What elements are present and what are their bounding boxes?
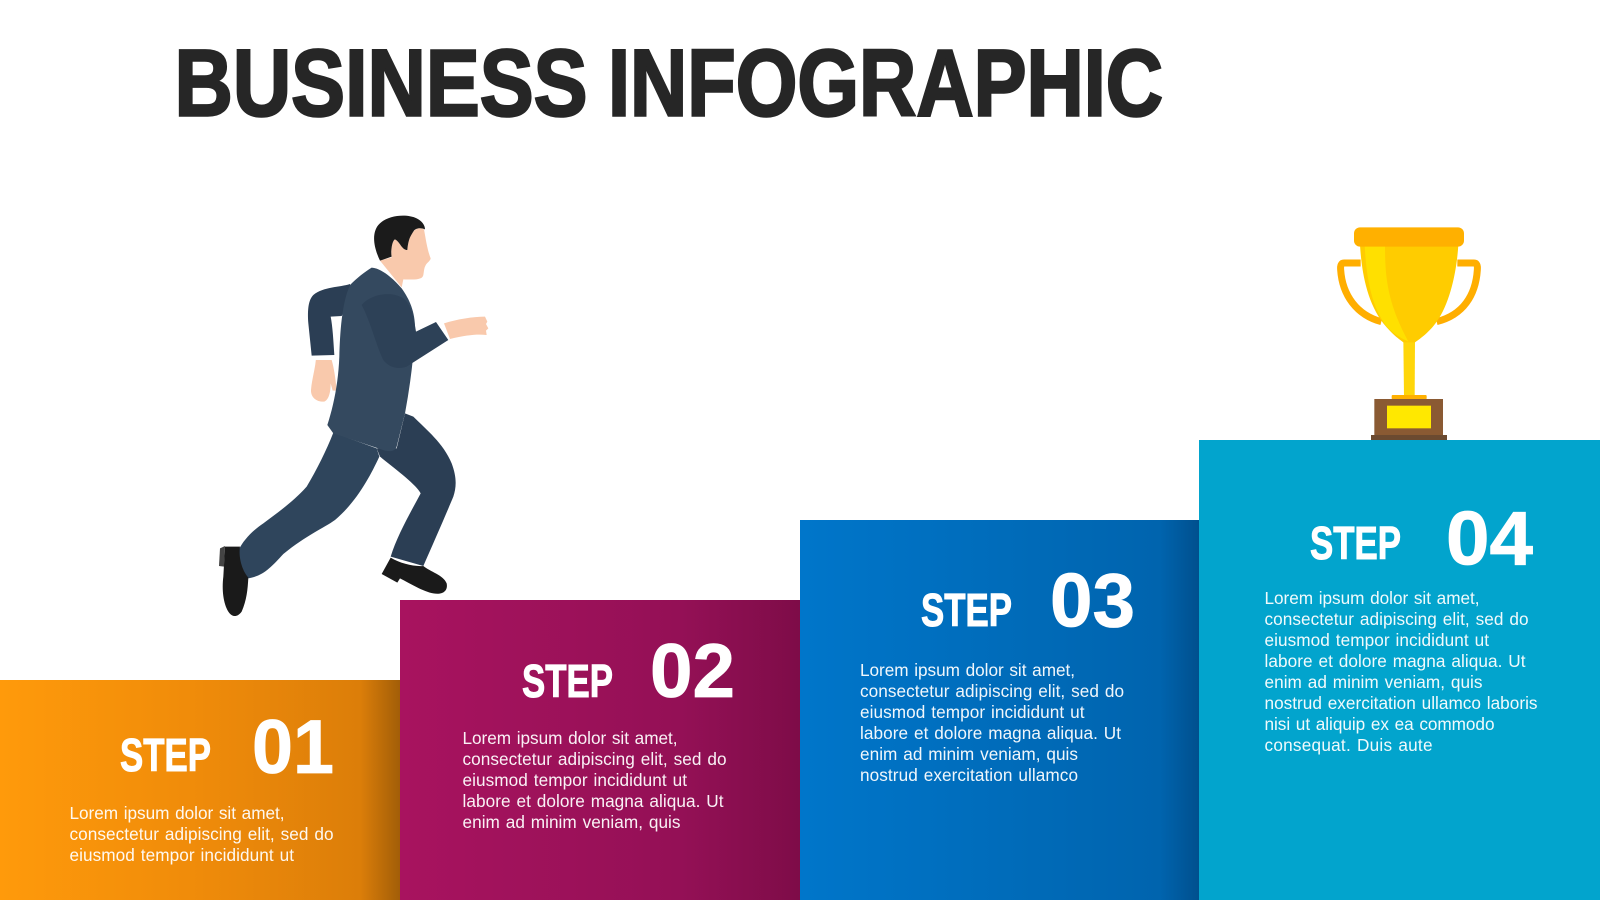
step 01 body text <box>70 803 334 865</box>
panel: step 04 <box>1199 440 1600 900</box>
step 01 body text: eiusmod tempor incididunt ut <box>70 845 294 865</box>
panel: step 01 <box>0 680 400 900</box>
step 03 body text: labore et dolore magna aliqua. Ut <box>860 723 1121 743</box>
step 03 body text <box>860 660 1124 785</box>
step 04 body text: nisi ut aliquip ex ea commodo <box>1264 714 1494 734</box>
step 01 number: 01 <box>252 705 334 790</box>
step 01 label: STEP <box>120 729 211 781</box>
step 02 label: STEP <box>522 655 613 707</box>
step 04 body text: enim ad minim veniam, quis <box>1264 672 1482 692</box>
step 04 body text: consequat. Duis aute <box>1264 735 1432 755</box>
illustration: running businessman <box>219 216 488 616</box>
step 04 body text: eiusmod tempor incididunt ut <box>1264 630 1489 650</box>
step 01 body text: Lorem ipsum dolor sit amet, <box>70 803 284 823</box>
step 04 label: STEP <box>1310 517 1401 569</box>
step 03 body text: eiusmod tempor incididunt ut <box>860 702 1085 722</box>
step 04 body text: Lorem ipsum dolor sit amet, <box>1264 588 1480 608</box>
step 03 body text: enim ad minim veniam, quis <box>860 744 1078 764</box>
title: BUSINESS <box>174 30 588 136</box>
step 04 body text: labore et dolore magna aliqua. Ut <box>1264 651 1526 671</box>
step 02 number: 02 <box>650 629 735 714</box>
illustration: trophy <box>1341 227 1477 440</box>
step 04 body text: consectetur adipiscing elit, sed do <box>1264 609 1528 629</box>
step 02 body text: consectetur adipiscing elit, sed do <box>462 749 726 769</box>
step 03 body text: Lorem ipsum dolor sit amet, <box>860 660 1075 680</box>
step 03 label: STEP <box>921 584 1012 636</box>
step 02 body text: eiusmod tempor incididunt ut <box>462 770 687 790</box>
step 02 body text: enim ad minim veniam, quis <box>462 812 680 832</box>
title: INFOGRAPHIC <box>608 30 1163 136</box>
step 03 number: 03 <box>1050 558 1135 644</box>
step 02 body text: Lorem ipsum dolor sit amet, <box>462 728 678 748</box>
step 04 body text: nostrud exercitation ullamco laboris <box>1264 693 1538 713</box>
title <box>174 30 1163 136</box>
step 04 number: 04 <box>1446 496 1533 582</box>
panel: step 03 <box>800 520 1200 900</box>
step 03 body text: nostrud exercitation ullamco <box>860 765 1078 785</box>
step 02 body text <box>462 728 726 832</box>
step 01 body text: consectetur adipiscing elit, sed do <box>70 824 334 844</box>
step 03 body text: consectetur adipiscing elit, sed do <box>860 681 1124 701</box>
step 02 body text: labore et dolore magna aliqua. Ut <box>462 791 724 811</box>
panel: step 02 <box>400 600 800 900</box>
step 04 body text <box>1264 588 1538 755</box>
